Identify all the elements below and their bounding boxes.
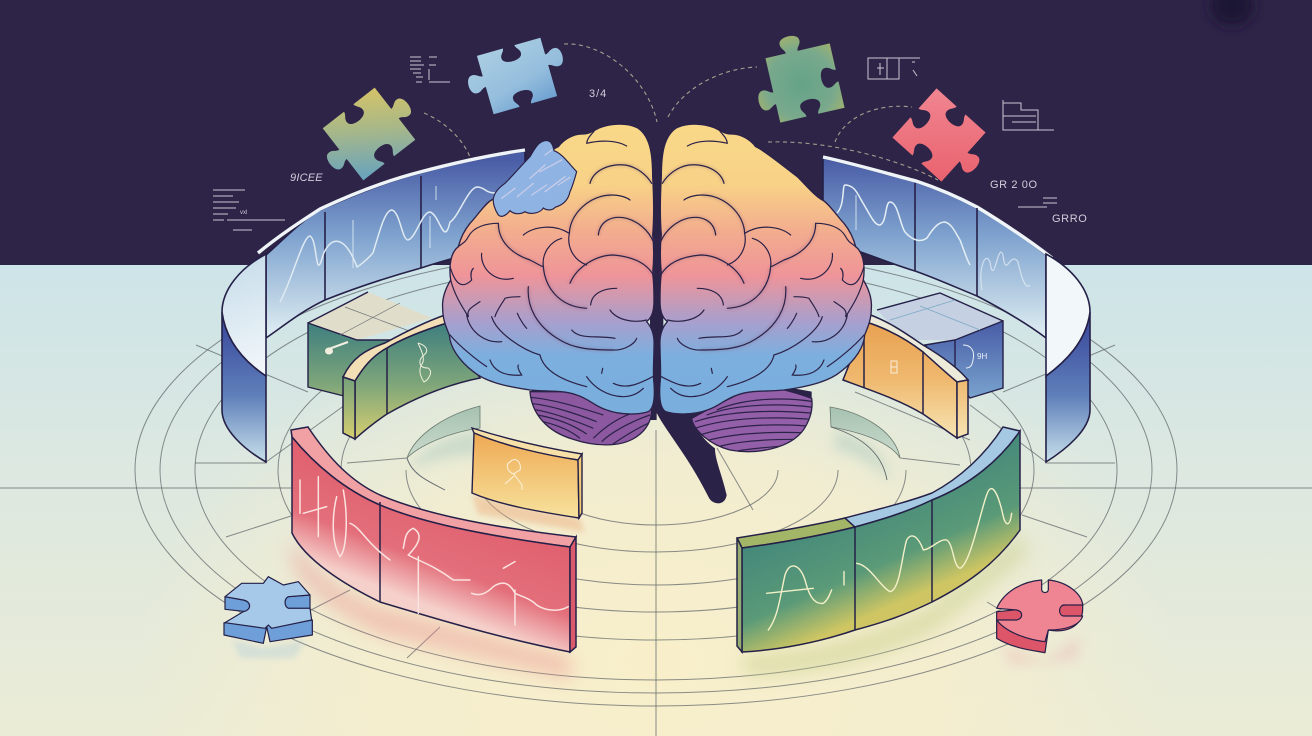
- right hemisphere: [660, 124, 871, 414]
- label: GR 2 0O: GR 2 0O: [990, 179, 1038, 191]
- label: small note text: vxl: [240, 210, 247, 216]
- left curved green panel: [343, 315, 480, 439]
- center yellow panel: [472, 428, 582, 518]
- inner floor well: [407, 406, 900, 490]
- right cube: 9H: [977, 352, 987, 361]
- floor shadow of yellow panel: [472, 495, 585, 532]
- puzzle piece: blue top: [461, 33, 573, 119]
- puzzle piece: red: [892, 88, 998, 192]
- brain stem: [655, 407, 727, 503]
- blue patch on brain: [493, 141, 577, 216]
- shadow under red piece: [1002, 635, 1080, 665]
- sketch box: top right: [868, 58, 920, 79]
- brain midline gap: [650, 153, 663, 413]
- puzzle piece: yellow-teal: [310, 78, 428, 190]
- smudge at top right: [1210, 0, 1254, 26]
- white top rim left: [258, 150, 525, 253]
- panel dividers and waves on left wall: [280, 176, 495, 302]
- back wall right: blue curved panels: [823, 157, 1052, 338]
- red panel waves: [300, 477, 568, 625]
- dark underside left: [530, 387, 657, 420]
- panel dividers and waves on right wall: [837, 183, 1030, 296]
- back wall left: blue curved panels: [258, 150, 525, 338]
- dark sky background: [0, 0, 1312, 265]
- red floor puzzle piece: [997, 580, 1083, 653]
- sketch stairs: right: [1003, 100, 1054, 130]
- sketch lines: top note: [410, 57, 450, 82]
- floor grid: concentric rings and radial lines: [0, 234, 1312, 736]
- right curved orange panel: [843, 314, 968, 438]
- green panel waves: [767, 489, 1012, 630]
- label: 3/4: 3/4: [589, 88, 607, 100]
- dark underside right: [657, 382, 812, 422]
- red curved panel: [291, 427, 576, 652]
- left cube: [308, 292, 432, 400]
- shadow under red panel: [292, 540, 572, 680]
- right end of wall: [1046, 254, 1090, 462]
- label: GRRO: GRRO: [1052, 213, 1087, 225]
- floor: [0, 265, 1312, 736]
- right cube: [877, 293, 1003, 398]
- sketch lines: left note: [213, 190, 285, 230]
- sulci soft shading: [498, 165, 653, 350]
- dashed trajectory arcs: [424, 44, 938, 180]
- puzzle piece: green: [746, 28, 845, 126]
- left hemisphere: [443, 124, 654, 414]
- sketch lines: right note: [1018, 198, 1057, 207]
- shadow under green panel: [742, 533, 1028, 675]
- blue floor puzzle piece: [224, 577, 312, 643]
- left end of wall: [222, 254, 266, 462]
- soft shadow under blue piece: [232, 640, 305, 658]
- white top rim right: [823, 157, 1052, 258]
- sulci lines: [450, 130, 653, 397]
- cerebellum left: [530, 392, 652, 445]
- cerebellum right: [692, 385, 813, 452]
- label: 9ICEE: 9ICEE: [290, 172, 323, 184]
- brain: [443, 124, 871, 503]
- green curved panel: [737, 427, 1020, 652]
